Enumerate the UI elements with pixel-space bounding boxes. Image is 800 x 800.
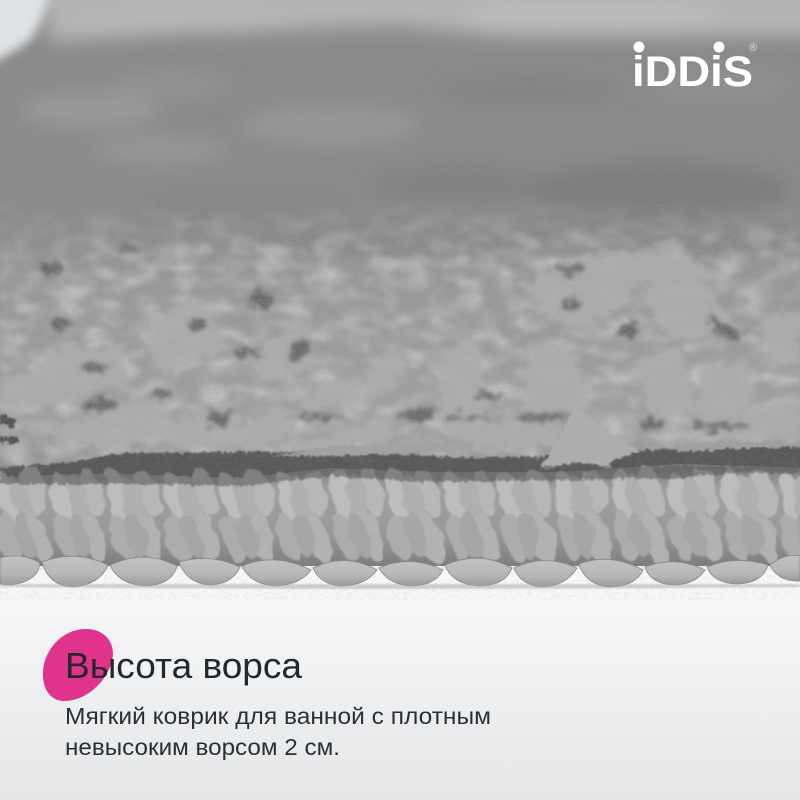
pile: dark crease above rope (0, 446, 800, 478)
logo: iDDiS: ® (749, 42, 757, 54)
description (65, 703, 491, 760)
mat: soft contact shadow (0, 584, 800, 589)
mat: twisted rope edge (0, 464, 800, 566)
photo: bath mat (0, 0, 800, 589)
pile: light tufts (0, 250, 800, 452)
heading: Высота ворса (65, 645, 303, 686)
mat: blurred far surface (0, 0, 800, 300)
window light corner (0, 0, 54, 68)
mat: fluffy pile (0, 200, 800, 490)
mat: bottom binding beads (0, 555, 800, 587)
pink blob accent (43, 629, 113, 701)
description: невысоким ворсом 2 см. (65, 734, 340, 760)
background (0, 570, 800, 800)
logo: iDDiS: iDDiS (632, 48, 753, 96)
pile: dark gaps (36, 214, 750, 430)
description: Мягкий коврик для ванной с плотным (65, 703, 491, 729)
